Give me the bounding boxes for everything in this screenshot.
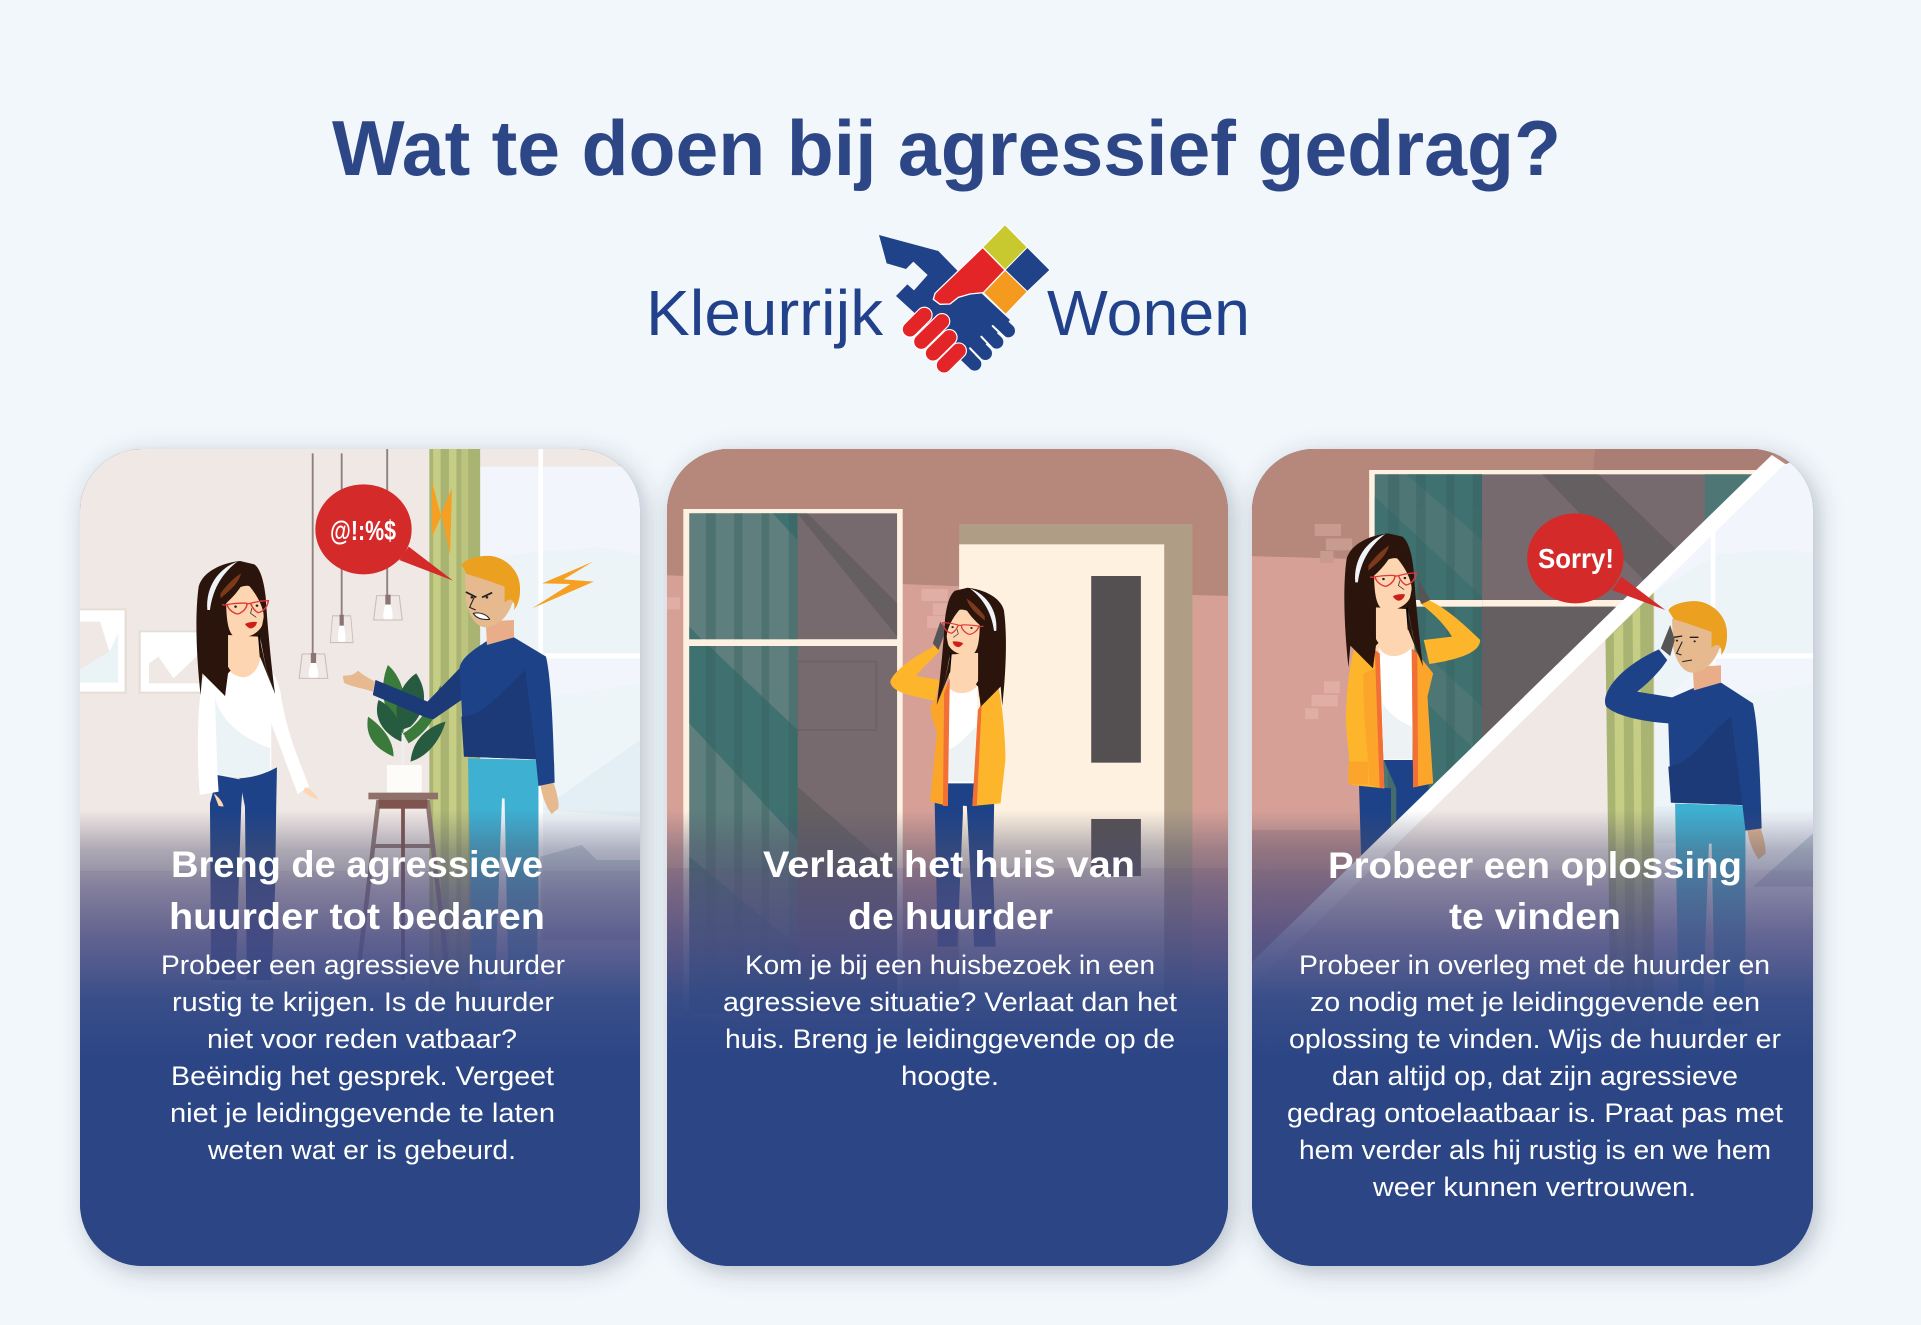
title: Wat te doen bij agressief gedrag? <box>332 104 1561 192</box>
logo wordmark right: Wonen <box>1047 277 1250 349</box>
card 3 heading <box>1328 845 1742 937</box>
card 1 body text: Beëindig het gesprek. Vergeet <box>171 1061 555 1091</box>
card 3 body text: zo nodig met je leidinggevende een <box>1310 987 1760 1017</box>
card 2 heading: Verlaat het huis van <box>763 844 1135 885</box>
woman on phone <box>890 588 1006 947</box>
white diagonal divider <box>1252 455 1786 978</box>
card 2 body text: hoogte. <box>901 1061 999 1091</box>
bush <box>667 1013 803 1107</box>
card 2 illustration <box>660 440 1262 1270</box>
woman in white sweater <box>196 561 318 980</box>
right half scene <box>1275 462 1813 990</box>
speech bubble text: @!:%$ <box>330 515 396 546</box>
card 2 body text: huis. Breng je leidinggevende op de <box>725 1024 1175 1054</box>
card 1 body text: niet je leidinggevende te laten <box>170 1098 555 1128</box>
card 1 shadow <box>80 449 640 1266</box>
woman on phone <box>1344 533 1480 856</box>
window in background <box>1369 470 1756 826</box>
card 2 body text: agressieve situatie? Verlaat dan het <box>723 987 1178 1017</box>
panel: card 3 find a solution <box>1243 440 1832 1286</box>
plant <box>367 665 446 792</box>
bricks <box>667 589 959 628</box>
hanging lamps <box>299 449 402 678</box>
card 1 heading: huurder tot bedaren <box>169 896 545 937</box>
card 2 heading: de huurder <box>848 896 1053 937</box>
door <box>959 524 1192 958</box>
card 1 body text: rustig te krijgen. Is de huurder <box>172 987 554 1017</box>
card 1 heading <box>169 844 545 937</box>
logo icon: handshake with coloured diamond <box>879 225 1050 365</box>
man on phone <box>1605 601 1766 1025</box>
card 3 body text: oplossing te vinden. Wijs de huurder er <box>1289 1024 1781 1054</box>
panel: card 2 leave the house <box>660 440 1262 1270</box>
speech bubble text: Sorry: Sorry! <box>1538 543 1614 574</box>
card 2 body text: Kom je bij een huisbezoek in een <box>745 950 1155 980</box>
picture frames <box>70 609 204 693</box>
card 3 heading: Probeer een oplossing <box>1328 845 1742 886</box>
card 2 body text <box>723 950 1178 1091</box>
card 1 heading: Breng de agressieve <box>171 844 543 885</box>
angry man <box>343 556 559 980</box>
card 3 body text: Probeer in overleg met de huurder en <box>1299 950 1770 980</box>
stool <box>360 793 446 980</box>
card 2 gradient overlay <box>667 810 1228 1270</box>
card 1 illustration <box>70 440 672 1270</box>
card 1 body text: weten wat er is gebeurd. <box>207 1135 516 1165</box>
logo wordmark left: Kleurrijk <box>646 277 884 349</box>
card 3 body text: hem verder als hij rustig is en we hem <box>1299 1135 1771 1165</box>
card 3 body text: weer kunnen vertrouwen. <box>1372 1172 1696 1202</box>
window <box>683 509 903 1013</box>
bricks <box>1315 524 1352 563</box>
window with sky <box>480 449 640 916</box>
curtain <box>429 449 480 1049</box>
card 3 illustration <box>1252 449 1813 1266</box>
card 2 heading <box>763 844 1135 937</box>
speech bubble shape <box>1527 513 1665 610</box>
lightning bolts <box>432 482 594 608</box>
card 1 body text: Probeer een agressieve huurder <box>161 950 565 980</box>
logo: Kleurrijk Wonen <box>646 225 1250 365</box>
card 3 shadow <box>1252 449 1813 1266</box>
card 1 gradient overlay <box>80 810 640 1270</box>
card 3 body text: gedrag ontoelaatbaar is. Praat pas met <box>1287 1098 1784 1128</box>
panel: card 1 calm the tenant <box>70 440 672 1270</box>
card 2 shadow <box>667 449 1228 1266</box>
card 3 heading: te vinden <box>1449 896 1621 937</box>
card 3 body text <box>1287 950 1784 1202</box>
card 3 gradient overlay <box>1252 810 1813 1270</box>
card 3 body text: dan altijd op, dat zijn agressieve <box>1332 1061 1738 1091</box>
card 1 body text <box>161 950 565 1165</box>
card 1 body text: niet voor reden vatbaar? <box>207 1024 517 1054</box>
speech bubble shape <box>315 484 453 581</box>
